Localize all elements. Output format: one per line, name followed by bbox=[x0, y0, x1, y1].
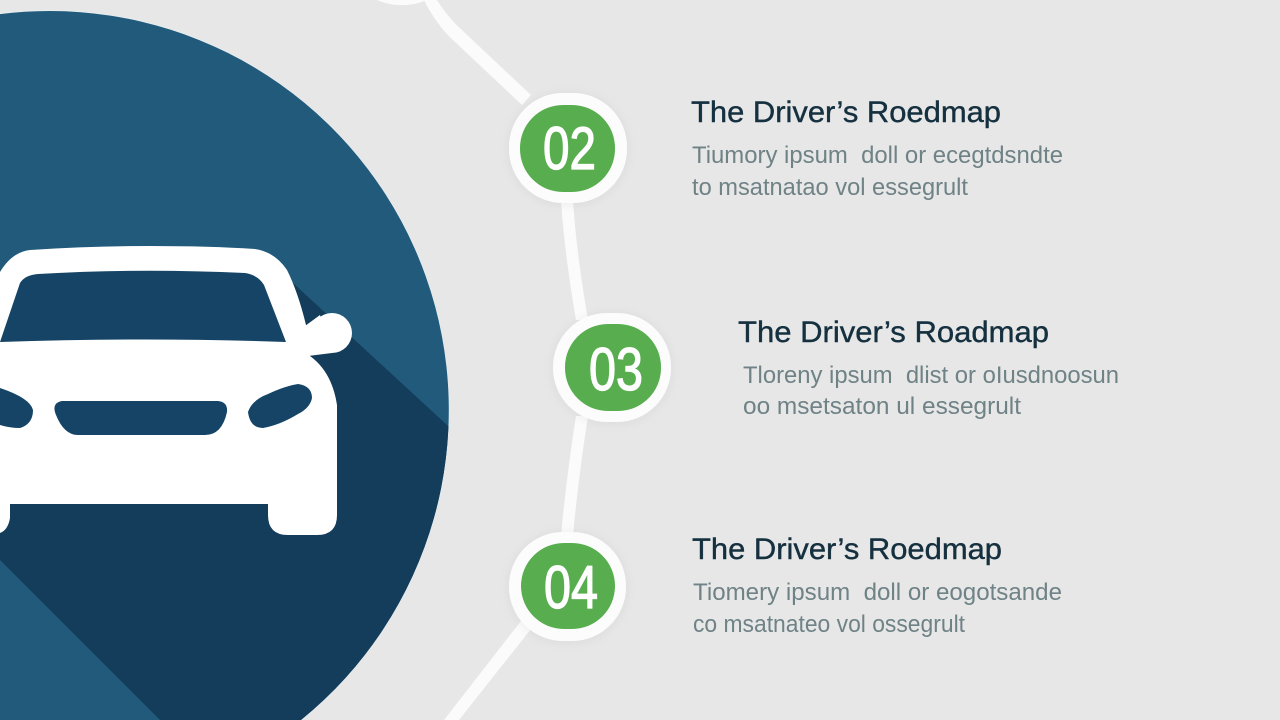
step 01 badge remnant bbox=[377, 0, 427, 5]
text block: step 03 bbox=[738, 316, 1119, 420]
text block: step 03: The Driver’s Roadmap bbox=[738, 316, 1049, 349]
text block: step 02: Tiumory ipsum doll or ecegtdsndte bbox=[692, 142, 1063, 169]
panel: car circle bbox=[0, 0, 460, 720]
text block: step 02 bbox=[691, 96, 1063, 201]
text block: step 02: to msatnatao vol essegrult bbox=[692, 174, 968, 201]
step 04 badge bbox=[509, 532, 626, 641]
text block: step 04: Tiomery ipsum doll or eogotsande bbox=[693, 579, 1062, 606]
step 03 badge bbox=[553, 313, 671, 422]
icon: car bbox=[0, 246, 352, 535]
step 04 badge: 04 bbox=[544, 554, 598, 621]
text block: step 03: oo msetsaton ul essegrult bbox=[743, 393, 1021, 420]
text block: step 03: Tloreny ipsum dlist or oIusdnoosun bbox=[743, 362, 1119, 389]
text block: step 04: The Driver’s Roedmap bbox=[692, 533, 1002, 566]
text block: step 02: The Driver’s Roedmap bbox=[691, 96, 1001, 129]
car long shadow bbox=[0, 283, 460, 720]
roadmap connecting line bbox=[424, 0, 588, 720]
step 03 badge: 03 bbox=[589, 336, 643, 403]
step 02 badge: 02 bbox=[543, 115, 596, 182]
text block: step 04: co msatnateo vol ossegrult bbox=[693, 611, 965, 638]
step 02 badge bbox=[509, 93, 627, 203]
text block: step 04 bbox=[692, 533, 1062, 638]
